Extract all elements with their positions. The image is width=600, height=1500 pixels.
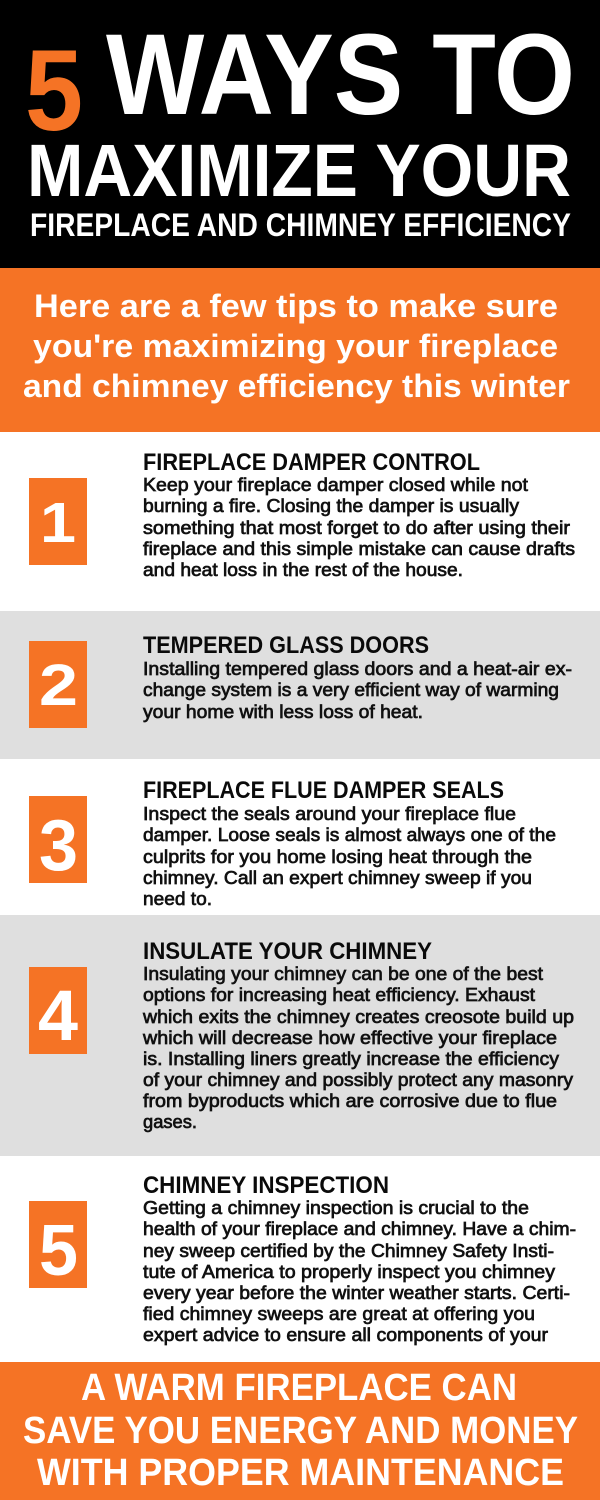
number badge 4: 4 xyxy=(38,977,79,1056)
body text: tip 1 xyxy=(143,475,575,580)
body text: tip 4 xyxy=(142,964,574,1132)
closing text: WITH PROPER MAINTENANCE xyxy=(37,1452,564,1494)
number badge 5 xyxy=(29,1201,87,1291)
body text: tip 4: of your chimney and possibly protect any masonry xyxy=(143,1070,573,1090)
panel: tip 4 xyxy=(0,915,600,1156)
intro text: and chimney efficiency this winter xyxy=(23,368,570,404)
heading: fireplace damper control: FIREPLACE DAMPER CONTROL xyxy=(143,449,480,476)
body text: tip 5: fied chimney sweeps are great at offering you xyxy=(143,1304,535,1324)
number badge 1: 1 xyxy=(40,491,76,555)
body text: tip 4: Insulating your chimney can be one of the best xyxy=(143,964,543,984)
body text: tip 5: expert advice to ensure all components of your xyxy=(143,1325,548,1345)
body text: tip 3 xyxy=(143,804,556,909)
body text: tip 5: ney sweep certified by the Chimney Safety Insti- xyxy=(143,1241,554,1261)
body text: tip 1: something that most forget to do after using their xyxy=(143,518,570,538)
number badge 3 xyxy=(29,796,87,886)
intro text xyxy=(23,288,570,404)
body text: tip 5: health of your fireplace and chimney. Have a chim- xyxy=(143,1219,576,1239)
body text: tip 4: gases. xyxy=(143,1112,197,1132)
body text: tip 3: chimney. Call an expert chimney sweep if you xyxy=(143,868,532,888)
number badge 1 xyxy=(29,478,87,565)
body text: tip 4: options for increasing heat efficiency. Exhaust xyxy=(143,985,535,1005)
panel: tip 1 xyxy=(0,432,600,611)
body text: tip 1: fireplace and this simple mistake can cause drafts xyxy=(143,539,575,559)
body text: tip 1: burning a fire. Closing the damper is usually xyxy=(143,496,519,516)
panel: closing banner xyxy=(0,1362,600,1500)
body text: tip 5: every year before the winter weather starts. Certi- xyxy=(143,1283,570,1303)
heading: fireplace flue damper seals: FIREPLACE FLUE DAMPER SEALS xyxy=(143,777,504,804)
body text: tip 3: damper. Loose seals is almost always one of the xyxy=(143,825,556,845)
body text: tip 2 xyxy=(143,659,572,722)
heading: tempered glass doors: TEMPERED GLASS DOORS xyxy=(143,632,429,659)
heading: insulate your chimney: INSULATE YOUR CHIMNEY xyxy=(143,938,432,965)
intro text: you're maximizing your fireplace xyxy=(33,328,558,364)
body text: tip 4: which exits the chimney creates creosote build up xyxy=(142,1007,574,1027)
body text: tip 3: Inspect the seals around your fireplace flue xyxy=(143,804,516,824)
body text: tip 4: from byproducts which are corrosive due to flue xyxy=(143,1091,557,1111)
number badge 4 xyxy=(29,967,87,1056)
body text: tip 5: Getting a chimney inspection is crucial to the xyxy=(143,1198,529,1218)
number badge 3: 3 xyxy=(39,806,78,886)
body text: tip 1: and heat loss in the rest of the house. xyxy=(143,560,463,580)
body text: tip 4: is. Installing liners greatly increase the efficiency xyxy=(143,1049,559,1069)
body text: tip 2: Installing tempered glass doors and a heat-air ex- xyxy=(143,659,572,679)
body text: tip 3: culprits for you home losing heat through the xyxy=(143,847,532,867)
closing text xyxy=(23,1367,578,1494)
body text: tip 3: need to. xyxy=(143,889,212,909)
body text: tip 4: which will decrease how effective your fireplace xyxy=(142,1028,557,1048)
intro text: Here are a few tips to make sure xyxy=(34,288,558,324)
number badge 2 xyxy=(29,641,87,728)
body text: tip 2: your home with less loss of heat. xyxy=(143,702,423,722)
panel: tip 3 xyxy=(0,759,600,915)
number badge 2: 2 xyxy=(39,653,78,718)
panel: intro banner xyxy=(0,268,600,432)
panel: tip 2 xyxy=(0,611,600,759)
body text: tip 5 xyxy=(143,1198,576,1345)
title number 5: 5 xyxy=(25,27,83,155)
body text: tip 5: tute of America to properly inspect you chimney xyxy=(143,1262,555,1282)
number badge 5: 5 xyxy=(39,1211,78,1291)
body text: tip 1: Keep your fireplace damper closed while not xyxy=(143,475,528,495)
body text: tip 2: change system is a very efficient way of warming xyxy=(143,680,559,700)
heading: chimney inspection: CHIMNEY INSPECTION xyxy=(143,1172,389,1199)
panel: title header xyxy=(0,0,600,268)
closing text: A WARM FIREPLACE CAN xyxy=(81,1367,517,1409)
panel: tip 5 xyxy=(0,1156,600,1362)
